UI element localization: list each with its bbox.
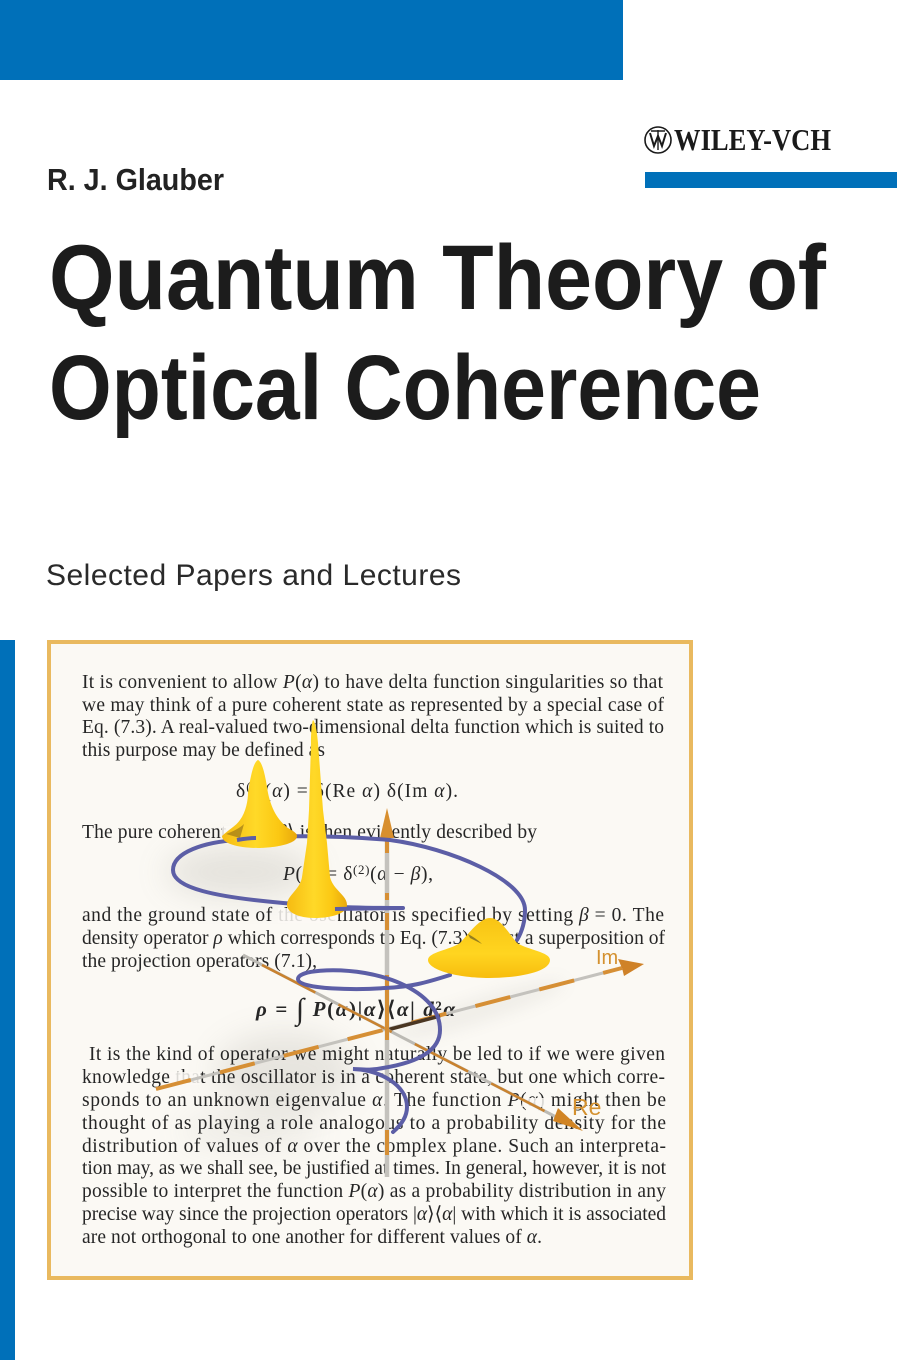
title: Quantum Theory of [49,227,826,329]
page text: and the ground state of the oscillator is specified by setting β = 0. The [82,905,664,926]
page text: knowledge that the oscillator is in a coherent state, but one which corre- [82,1067,665,1088]
page text: sponds to an unknown eigenvalue α. The function P(α) might then be [82,1090,666,1111]
spiral curve [173,836,525,1132]
axis: Re: Re [572,1094,601,1120]
faded patches over text [170,826,552,1107]
page text: P(α)|α⟩⟨α| d²α [313,997,455,1021]
spiral segment over tall peak [335,908,403,909]
icon: Wiley emblem [645,127,671,153]
page text: the projection operators (7.1), [82,951,317,972]
page text: are not orthogonal to one another for different values of α. [82,1227,542,1248]
soft paper shadows [165,846,569,1148]
subtitle: Selected Papers and Lectures [46,559,461,592]
page text: possible to interpret the function P(α) as a probability distribution in any [82,1181,666,1202]
page text: ρ = [256,997,287,1021]
page text: precise way since the projection operators |α⟩⟨α| with which it is associated [82,1204,666,1225]
page text: distribution of values of α over the complex plane. Such an interpreta- [82,1136,666,1157]
chart: complex plane axes [156,808,644,1177]
paper background with gold frame [49,642,691,1278]
title [49,227,826,439]
page text: we may think of a pure coherent state as represented by a special case of [82,695,664,716]
page text: It is the kind of operator we might naturally be led to if we were given [89,1044,665,1065]
page text: α) = δ(Re α) δ(Im α). [272,781,458,802]
publisher logo [645,122,831,157]
axis: Im [156,947,644,1089]
page text: ( [265,781,271,802]
page text: thought of as playing a role analogous to a probability density for the [82,1113,666,1134]
peak: tall centre [287,720,403,918]
panel: paper illustration [49,642,691,1278]
axis: Im: Im [596,947,618,969]
spiral segment over left peak [237,838,256,840]
page text: tion may, as we shall see, be justified at times. In general, however, it is not [82,1158,667,1179]
left blue bar [0,640,15,1360]
page text: ( [370,864,377,885]
publisher name: WILEY-VCH [674,122,831,157]
axis: Re [243,955,601,1131]
title: Optical Coherence [49,337,761,439]
page text: Eq. (7.3). A real-valued two-dimensional delta function which is suited to [82,717,664,738]
page text: δ [236,781,245,802]
page text: (2) [246,779,263,794]
axis: vertical [380,808,394,1177]
page text: P(α) = δ [283,864,352,885]
top blue bar [0,0,623,80]
page text: The pure coherent state |β⟩ is then evidently described by [82,822,537,843]
peak: wide right [428,918,550,978]
page text [82,672,667,1248]
page text: α − β), [377,864,433,885]
publisher underline bar [645,172,897,188]
page text: (2) [353,862,369,877]
author: R. J. Glauber [47,162,224,197]
page text: It is convenient to allow P(α) to have delta function singularities so that [82,672,664,693]
page text: ∫ [294,993,306,1028]
page text: density operator ρ which corresponds to Eq. (7.3) is just a superposition of [82,928,666,949]
page text: this purpose may be defined as [82,740,325,761]
peak: medium left [222,760,297,848]
